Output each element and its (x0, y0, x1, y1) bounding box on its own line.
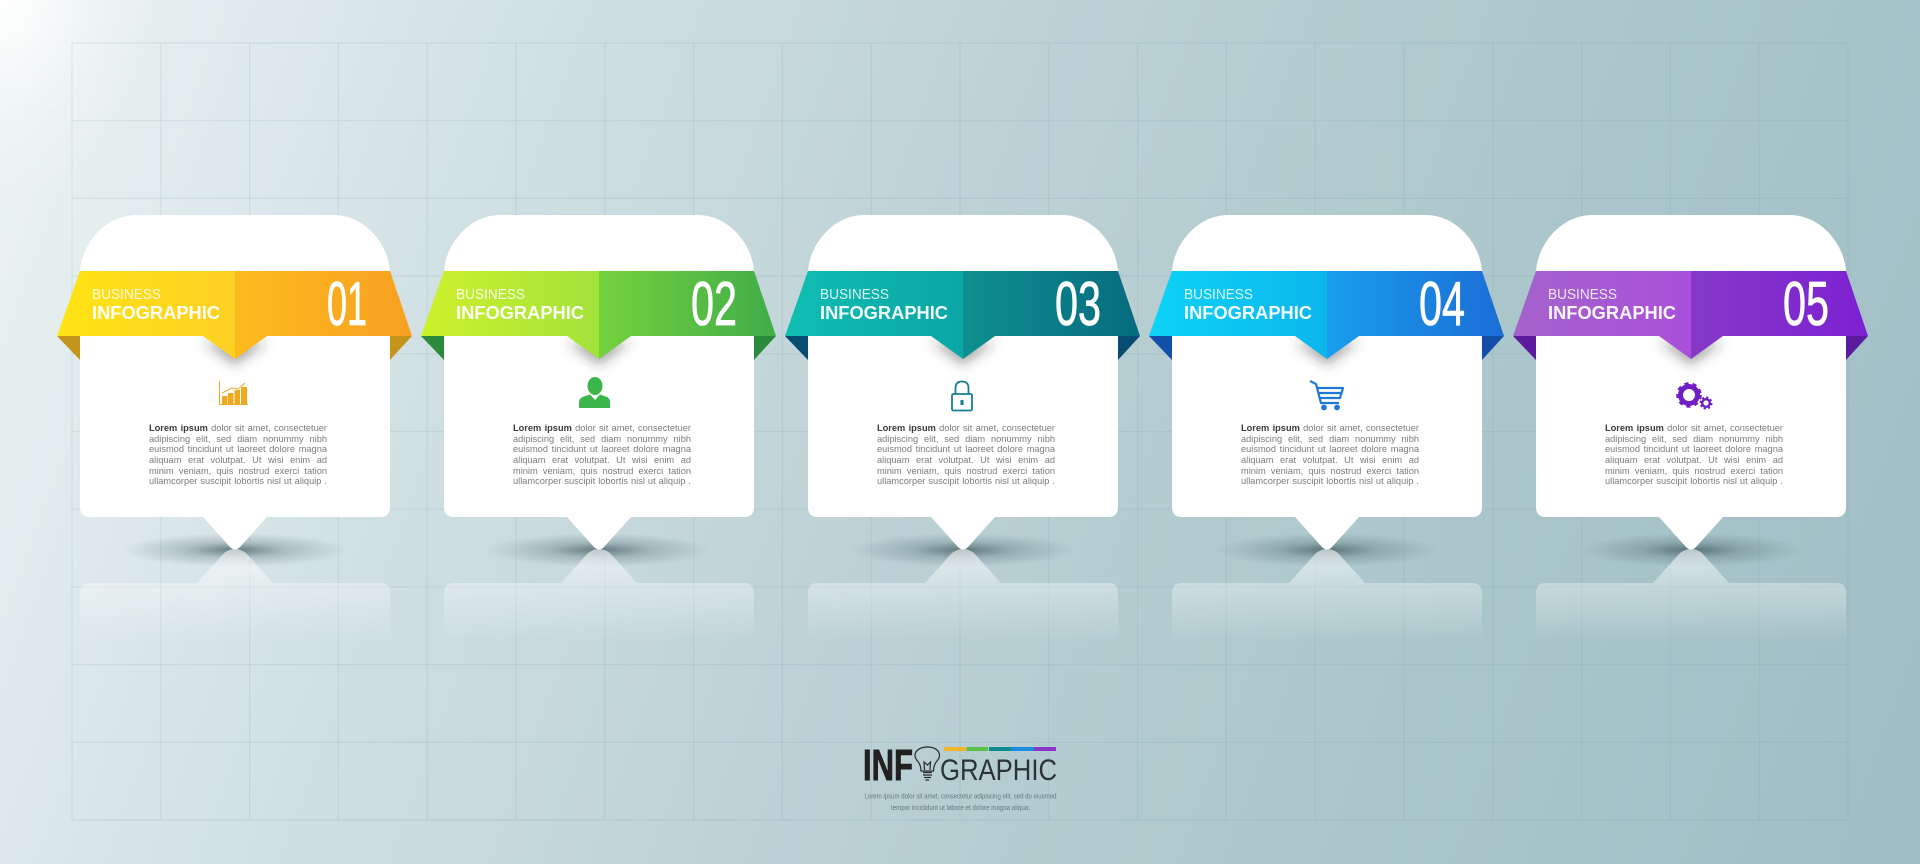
card reflection (808, 549, 1118, 642)
ribbon shadow (1295, 342, 1359, 365)
number: 03 (1055, 270, 1101, 339)
text block: ullamcorper suscipit lobortis nisl ut aliquip . (1605, 476, 1783, 486)
floor shadow (851, 533, 1075, 567)
ribbon title: INFOGRAPHIC (820, 302, 948, 323)
ribbon title: INFOGRAPHIC (1548, 302, 1676, 323)
panel: card 01 (57, 215, 412, 619)
text block: euismod tincidunt ut laoreet dolore magna (513, 444, 691, 454)
ribbon right half (1327, 271, 1504, 359)
ribbon title (820, 287, 948, 323)
card body (444, 215, 754, 550)
ribbon shadow (1659, 342, 1723, 365)
icon: light bulb (915, 747, 940, 780)
ribbon title (456, 287, 584, 323)
logo caption (864, 792, 1056, 812)
text block: aliquam erat volutpat. Ut wisi enim ad (513, 455, 691, 465)
logo: infographic footer (863, 742, 1057, 812)
panel: card 03 (785, 215, 1140, 626)
ribbon title: INFOGRAPHIC (92, 302, 220, 323)
ribbon title (92, 287, 220, 323)
text block: minim veniam, quis nostrud exerci tation (513, 466, 691, 476)
floor shadow (487, 533, 711, 567)
ribbon folds (57, 336, 412, 360)
text block: ullamcorper suscipit lobortis nisl ut aliquip . (877, 476, 1055, 486)
floor shadow (1579, 533, 1803, 567)
logo caption: tempor incididunt ut labore et dolore magna aliqua. (891, 803, 1030, 812)
text block (877, 423, 1055, 486)
ribbon title: BUSINESS (456, 287, 525, 303)
icon: shopping cart (1310, 381, 1343, 409)
ribbon title: BUSINESS (1548, 287, 1617, 303)
text block: Lorem ipsum dolor sit amet, consectetuer (149, 423, 327, 433)
ribbon shadow (203, 342, 267, 365)
text block: adipiscing elit, sed diam nonummy nibh (877, 434, 1055, 444)
icon: person (579, 377, 610, 408)
logo word INF: INF (863, 742, 913, 790)
text block: aliquam erat volutpat. Ut wisi enim ad (877, 455, 1055, 465)
ribbon left half (421, 271, 599, 359)
ribbon right half (963, 271, 1140, 359)
card body (808, 215, 1118, 550)
text block (1241, 423, 1419, 486)
text block: aliquam erat volutpat. Ut wisi enim ad (149, 455, 327, 465)
panel: card 02 (421, 215, 776, 623)
ribbon left half (1513, 271, 1691, 359)
icon: bar chart (219, 381, 248, 405)
card reflection (1536, 549, 1846, 642)
ribbon title (1184, 287, 1312, 323)
number: 02 (691, 270, 737, 339)
ribbon folds (421, 336, 776, 360)
text block: adipiscing elit, sed diam nonummy nibh (1605, 434, 1783, 444)
text block: minim veniam, quis nostrud exerci tation (149, 466, 327, 476)
ribbon title: BUSINESS (1184, 287, 1253, 303)
text block: euismod tincidunt ut laoreet dolore magna (1241, 444, 1419, 454)
card body (80, 215, 390, 550)
text block (513, 423, 691, 486)
ribbon right half (599, 271, 776, 359)
floor shadow (1215, 533, 1439, 567)
card reflection (80, 549, 390, 642)
ribbon right half (235, 271, 412, 359)
card reflection (444, 549, 754, 642)
text block: aliquam erat volutpat. Ut wisi enim ad (1241, 455, 1419, 465)
text block: minim veniam, quis nostrud exerci tation (1605, 466, 1783, 476)
panel: card 05 (1513, 215, 1868, 628)
text block: Lorem ipsum dolor sit amet, consectetuer (513, 423, 691, 433)
ribbon folds (1149, 336, 1504, 360)
text block: euismod tincidunt ut laoreet dolore magna (877, 444, 1055, 454)
text block (149, 423, 327, 486)
ribbon title: BUSINESS (92, 287, 161, 303)
ribbon title: INFOGRAPHIC (1184, 302, 1312, 323)
text block: minim veniam, quis nostrud exerci tation (1241, 466, 1419, 476)
ribbon left half (1149, 271, 1327, 359)
text block: Lorem ipsum dolor sit amet, consectetuer (1241, 423, 1419, 433)
icon: gears (1678, 384, 1712, 408)
ribbon right half (1691, 271, 1868, 359)
card reflection (1172, 549, 1482, 642)
floor shadow (123, 533, 347, 567)
number: 05 (1783, 270, 1829, 339)
number: 01 (327, 270, 367, 339)
ribbon shadow (567, 342, 631, 365)
text block: Lorem ipsum dolor sit amet, consectetuer (877, 423, 1055, 433)
number: 04 (1419, 270, 1465, 339)
rainbow bar (944, 747, 1056, 751)
ribbon shadow (931, 342, 995, 365)
text block: ullamcorper suscipit lobortis nisl ut aliquip . (513, 476, 691, 486)
card body (1536, 215, 1846, 550)
ribbon folds (1513, 336, 1868, 360)
text block: adipiscing elit, sed diam nonummy nibh (149, 434, 327, 444)
text block (1605, 423, 1783, 486)
text block: ullamcorper suscipit lobortis nisl ut aliquip . (1241, 476, 1419, 486)
text block: minim veniam, quis nostrud exerci tation (877, 466, 1055, 476)
text block: adipiscing elit, sed diam nonummy nibh (513, 434, 691, 444)
ribbon title (1548, 287, 1676, 323)
ribbon title: INFOGRAPHIC (456, 302, 584, 323)
text block: aliquam erat volutpat. Ut wisi enim ad (1605, 455, 1783, 465)
card body (1172, 215, 1482, 550)
ribbon left half (57, 271, 235, 359)
icon: padlock (952, 382, 972, 410)
text block: euismod tincidunt ut laoreet dolore magna (149, 444, 327, 454)
text block: euismod tincidunt ut laoreet dolore magna (1605, 444, 1783, 454)
ribbon left half (785, 271, 963, 359)
ribbon folds (785, 336, 1140, 360)
text block: ullamcorper suscipit lobortis nisl ut aliquip . (149, 476, 327, 486)
text block: adipiscing elit, sed diam nonummy nibh (1241, 434, 1419, 444)
panel: card 04 (1149, 215, 1504, 627)
text block: Lorem ipsum dolor sit amet, consectetuer (1605, 423, 1783, 433)
ribbon title: BUSINESS (820, 287, 889, 303)
